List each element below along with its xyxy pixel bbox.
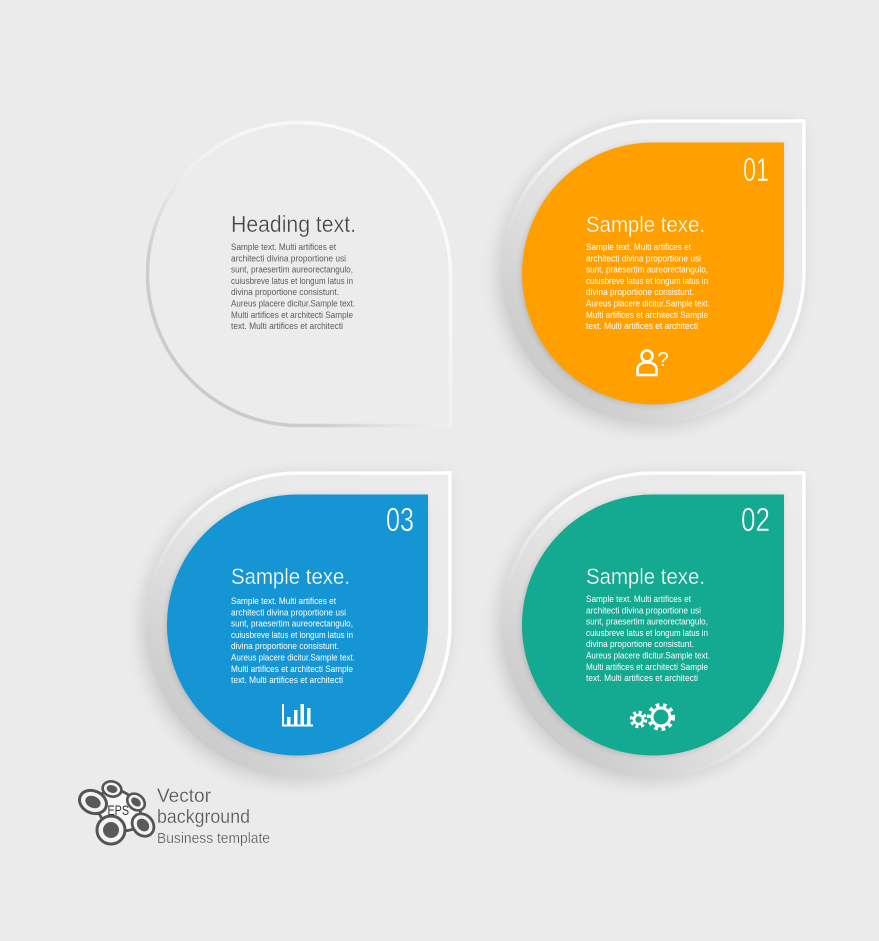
text block: orange body — [586, 242, 710, 332]
logo halo — [93, 789, 143, 830]
text block: green body: Multi artifices et architecti Sample — [586, 662, 708, 673]
text block: blue body: Aureus placere dicitur.Sample text. — [231, 652, 355, 664]
text block: orange body: text. Multi artifices et architecti — [586, 321, 698, 332]
band: orange drop ring — [502, 121, 804, 423]
logo ring: top — [101, 779, 123, 799]
text block: green body: cuiusbreve latus et longum latus in — [586, 628, 708, 639]
text block: green body — [586, 594, 710, 684]
outline: blue drop ring — [146, 473, 450, 777]
text block: vector background — [157, 786, 270, 847]
number: 03: 03 — [386, 501, 414, 538]
logo ring centre — [103, 822, 119, 838]
band: blue drop ring — [146, 473, 450, 777]
text block: green body: divina proportione consistunt. — [586, 639, 694, 650]
text block: heading panel body: cuiusbreve latus et longum latus in — [231, 276, 353, 287]
drop: orange fill — [522, 142, 784, 404]
text block: green body: text. Multi artifices et architecti — [586, 673, 698, 684]
text block: blue body: text. Multi artifices et architecti — [231, 675, 343, 686]
text block: blue body: Multi artifices et architecti Sample — [231, 664, 353, 675]
drop: green fill — [522, 494, 784, 756]
shadow: orange outer ring — [498, 125, 800, 427]
band: green drop ring — [502, 473, 804, 777]
icon: gears — [631, 705, 673, 729]
heading: heading text: Heading text. — [231, 211, 356, 237]
text block: heading panel body: sunt, praesertim aureorectangulo, — [231, 265, 353, 276]
text block: heading panel body: divina proportione consistunt. — [231, 287, 339, 298]
panel: blue drop 03 — [142, 473, 450, 781]
heading: blue sample: Sample texe. — [231, 564, 350, 589]
outline: orange drop ring — [502, 121, 804, 423]
text block: heading panel body: Multi artifices et architecti Sample — [231, 310, 353, 321]
panel: orange drop 01 — [498, 121, 804, 427]
icon: person with question mark — [638, 349, 669, 375]
shadow: green fill — [521, 496, 783, 756]
number: 01: 01 — [743, 151, 769, 188]
text block: blue body: sunt, praesertim aureorectangulo, — [231, 619, 353, 630]
heading: green sample: Sample texe. — [586, 564, 705, 589]
shadow: blue fill — [166, 496, 427, 756]
text block: orange body: Multi artifices et architecti Sample — [586, 310, 708, 321]
text block: green body: Aureus placere dicitur.Sample text. — [586, 650, 710, 662]
shadow: blue outer ring — [142, 477, 446, 781]
logo: EPS badge — [76, 779, 158, 844]
text block: blue body: divina proportione consistunt. — [231, 641, 339, 652]
outline: green drop ring — [502, 473, 804, 777]
text block: blue body: architecti divina proportione usi — [231, 607, 346, 618]
logo ring: left — [76, 786, 110, 818]
text block: heading panel body: Sample text. Multi artifices et — [231, 242, 336, 253]
text block: orange body: Aureus placere dicitur.Sample text. — [586, 298, 710, 310]
text block: orange body: divina proportione consistunt. — [586, 287, 694, 298]
text block: vector background: background — [157, 807, 250, 828]
text block: heading panel body: text. Multi artifices et architecti — [231, 321, 343, 332]
text block: orange body: cuiusbreve latus et longum latus in — [586, 276, 708, 287]
panel: green drop 02 — [498, 473, 804, 781]
shadow: orange fill — [521, 144, 783, 406]
icon: bar chart — [282, 704, 313, 726]
text block: green body: sunt, praesertim aureorectangulo, — [586, 617, 708, 628]
text block: heading panel body: architecti divina proportione usi — [231, 253, 346, 264]
drop: blue fill — [167, 494, 428, 756]
text block: orange body: sunt, praesertim aureorectangulo, — [586, 265, 708, 276]
logo label: EPS: EPS — [108, 802, 129, 818]
text block: orange body: Sample text. Multi artifices et — [586, 242, 691, 253]
text block: vector background: Vector — [157, 786, 212, 807]
text block: orange body: architecti divina proportione usi — [586, 253, 701, 264]
text block: vector background: Business template — [157, 831, 270, 847]
icon: person with question mark: ? — [658, 349, 669, 371]
logo ring: upper right — [124, 790, 148, 814]
number: 02: 02 — [741, 501, 770, 538]
text block: blue body: cuiusbreve latus et longum latus in — [231, 630, 353, 641]
heading: orange sample: Sample texe. — [586, 212, 705, 237]
text block: heading panel body: Aureus placere dicitur.Sample text. — [231, 298, 355, 310]
logo ring: lower right — [128, 809, 158, 841]
text block: green body: Sample text. Multi artifices et — [586, 594, 691, 605]
text block: blue body: Sample text. Multi artifices et — [231, 596, 336, 607]
outline: heading drop ring — [148, 122, 450, 426]
text block: green body: architecti divina proportione usi — [586, 605, 701, 616]
panel: heading drop — [148, 122, 450, 426]
shadow: green outer ring — [498, 477, 800, 781]
logo ring: bottom — [97, 816, 125, 844]
text block: blue body — [231, 596, 355, 686]
logo connectors — [93, 789, 143, 831]
text block: heading panel body — [231, 242, 355, 332]
